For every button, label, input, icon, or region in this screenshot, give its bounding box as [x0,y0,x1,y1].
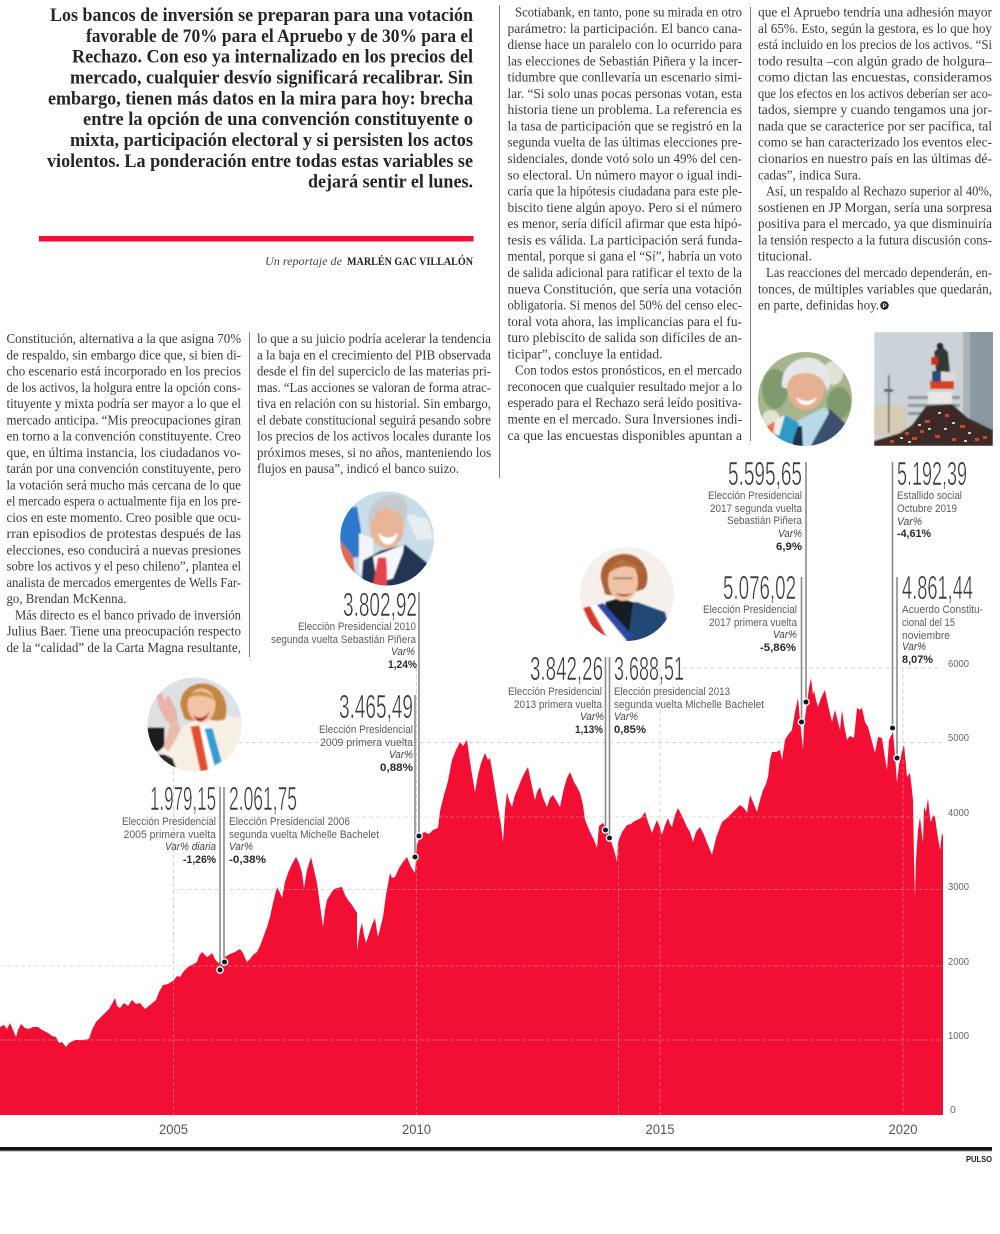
callout: 5.192,39: Estallido social [897,490,962,502]
callout: 1.979,15: Elección Presidencial [122,816,216,828]
bottom rule [0,1147,992,1152]
text column 2: el debate constitucional seguirá pesando sobre [257,413,491,428]
callout: 5.192,39 [889,455,967,731]
lead paragraph: dejará sentir el lunes. [308,173,473,193]
lead paragraph: Los bancos de inversión se preparan para una votación [50,6,474,26]
callout: 5.076,02: 5.076,02 [723,569,796,606]
text column 3: segunda vuelta de las últimas elecciones pre- [508,136,742,151]
text column 3: es menor, sería difícil afirmar que esta hipó- [508,217,742,232]
lead paragraph: entre la opción de una convención constituyente o [83,110,473,130]
callout: 1.979,15 [122,780,223,973]
text column 3: ticipar”, concluye la entidad. [508,347,662,362]
text column 2: flujos en pausa”, indicó el banco suizo. [257,462,459,477]
icon: end-of-article bullet: P [882,303,887,310]
byline: Un reportaje de [265,254,343,268]
callout: 3.842,26: 1,13% [575,724,603,736]
text column 1: analista de mercados emergentes de Wells Far- [6,576,241,591]
text column 1: Julius Baer. Tiene una preocupación respecto [6,624,241,640]
y axis labels: 3000 [948,881,969,893]
text column 1: de los activos, la holgura entre la opción cons- [6,381,241,396]
callout: 3.842,26: Var% [580,711,604,723]
text column 1: el mercado espera o actualmente fija en los pre- [6,494,241,510]
text column 1: rran episodios de protestas después de las [6,527,241,542]
callout: 3.688,51: Var% [614,711,638,723]
callout: 4.861,44: noviembre [902,630,950,642]
text column 1: sobre los activos y el peso chileno”, plantea el [6,560,241,574]
text column 3: diense hace un paralelo con lo ocurrido para [508,38,743,53]
lead paragraph: violentos. La ponderación entre todas estas variables se [47,152,473,172]
callout: 5.595,65: 5.595,65 [728,455,802,492]
callout: 3.802,92: Var% [391,646,415,658]
callout: 5.076,02 [703,569,805,725]
callout: 5.076,02: -5,86% [760,642,796,654]
callout: 3.688,51: Elección presidencial 2013 [614,686,730,698]
text column 4: cionarios en nuestro país en las últimas dé- [758,152,992,167]
callout: 5.192,39: -4,61% [897,528,931,540]
x axis labels [159,1122,918,1137]
callout: 2.061,75 [221,780,379,965]
text column 3: caría que la hipótesis ciudadana para este ple- [508,185,742,200]
y axis labels: 4000 [948,807,969,819]
text column 1: go, Brendan McKenna. [6,592,126,607]
text column 3: turo plebiscito de salida son difíciles de an- [508,331,742,346]
text column 4: nada que se caracterice por ser pacífica, tal [758,120,992,134]
callout: 5.595,65: Elección Presidencial [708,490,802,502]
callout: 5.192,39: Octubre 2019 [897,503,957,515]
text column 1: tituyente y mixta podría ser mayor a lo que el [6,397,241,412]
text column 1: de respaldo, sin embargo dice que, si bien di- [6,348,241,363]
callout: 2.061,75: -0,38% [229,854,266,866]
photo: social uprising crowd on monument [874,330,995,446]
text column 1: Constitución, alternativa a la que asigna 70% [6,332,241,347]
gridlines over the area [0,760,943,1115]
lead paragraph: favorable de 70% para el Apruebo y de 30% para el [86,27,473,47]
callout: 3.465,49: Elección Presidencial [319,724,413,736]
text column 4: como dictan las encuestas, consideramos [758,71,992,86]
callout: 1.979,15: 2005 primera vuelta [124,829,217,841]
lead paragraph [47,6,474,193]
text column 1: en torno a la convención constituyente. Creo [6,430,241,444]
text column 1: de la “calidad” de la Carta Magna resultante, [6,641,241,656]
text column 4: todo resulta –con algún grado de holgura– [758,54,993,69]
text column 1: Más directo es el banco privado de inversión [15,608,241,623]
y axis labels: 0 [950,1104,956,1116]
text column 1: tarán por una convención constituyente, pero [6,462,241,477]
text column 3: ca que las encuestas disponibles apuntan a [508,429,743,444]
text column 1: que, en última instancia, los ciudadanos vo- [6,446,241,461]
callout: 3.688,51: 0,85% [614,724,646,736]
callout: 5.595,65 [708,455,809,705]
callout: 3.842,26: 2013 primera vuelta [514,699,603,711]
callout: 1.979,15: -1,26% [183,854,216,866]
callout: 3.465,49: Var% [389,749,413,761]
callout: 2.061,75: segunda vuelta Michelle Bachelet [229,829,379,841]
text column 3: Scotiabank, en tanto, pone su mirada en otro [515,6,742,20]
y axis labels: 1000 [948,1030,969,1042]
callout: 4.861,44: Var% [902,641,926,653]
y axis labels [948,658,969,1116]
chart gridlines [0,668,943,1115]
lead paragraph: Rechazo. Con eso ya internalizado en los precios del [72,48,473,68]
text column 2 [257,332,492,477]
callout: 3.842,26 [508,650,609,833]
text column 2: lo que a su juicio podría acelerar la tendencia [257,332,492,347]
text column 3: esperado para el Rechazo será leído positiva- [508,396,742,411]
text column 4: titucional. [758,250,812,265]
y axis labels: 5000 [948,732,969,744]
callout: 2.061,75: Var% [229,841,253,853]
lead paragraph: mixta, participación electoral y si persisten los actos [70,131,473,151]
text column 3 [508,6,743,444]
text column 3: la tasa de participación que se registró en la [508,120,743,134]
text column 1: mercado anticipa. “Mis preocupaciones giran [6,413,241,428]
callout: 3.802,92 [271,586,422,839]
text column 2: los precios de los activos locales durante los [257,430,491,444]
callout: 5.076,02: Elección Presidencial [703,604,797,616]
callout: 5.595,65: 2017 segunda vuelta [710,503,803,515]
callout: 3.802,92: 3.802,92 [343,586,417,623]
callout: 3.465,49 [319,688,418,860]
text column 3: toral vota ahora, las implicancias para el fu- [508,315,742,330]
byline: MARLÉN GAC VILLALÓN [347,254,474,268]
credit: PULSO [966,1154,992,1164]
text column 3: parámetro: la participación. El banco cana- [508,22,742,37]
callout: 5.595,65: Sebastián Piñera [727,515,803,527]
text column 3: las elecciones de Sebastián Piñera y la incer- [508,54,742,69]
callout: 3.688,51 [606,650,764,841]
text column 1 [6,332,241,656]
photo: Bachelet waving [148,678,242,772]
text column 2: a la baja en el crecimiento del PIB observada [257,348,492,363]
text column 3: historia tiene un problema. La referencia es [508,103,742,118]
text column 3: biscito tiene algún apoyo. Pero si el número [508,201,742,216]
text column 2: tiva en relación con su historial. Sin embargo, [257,397,491,412]
text column 3: nueva Constitución, que sería una votación [508,282,742,297]
text column 4: sostienen en JP Morgan, sería una sorpresa [758,201,993,216]
text column 3: so electoral. Un número mayor o igual indi- [508,168,742,183]
text column 3: reconocen que cualquier resultado mejor a lo [508,380,742,395]
text column 4: como se han caracterizado los eventos elec- [758,136,992,151]
callout: 5.076,02: Var% [773,629,797,641]
callout: 5.076,02: 2017 primera vuelta [709,617,798,629]
lead paragraph: mercado, cualquier desvío significará recalibrar. Sin [70,68,474,88]
callout: 2.061,75: 2.061,75 [229,780,297,817]
icon: end-of-article bullet [880,301,889,310]
text column 1: cios en este momento. Creo posible que ocu- [6,511,241,526]
callout: 4.861,44: cional del 15 [902,617,955,629]
callout: 4.861,44: 8,07% [902,654,933,666]
callout: 3.802,92: 1,24% [388,659,417,671]
callout: 3.842,26: Elección Presidencial [508,686,602,698]
y axis labels: 6000 [948,658,969,670]
callout: 3.802,92: segunda vuelta Sebastián Piñera [271,634,417,646]
text column 4: en parte, definidas hoy. [758,298,879,314]
text column 4: cadas”, indica Sura. [758,168,861,183]
callout: 3.688,51: 3.688,51 [614,650,684,687]
text column 2: próximos meses, si no años, manteniendo los [257,446,491,461]
x axis labels: 2020 [888,1122,918,1137]
text column 3: tidumbre que conllevaría un escenario simi- [508,71,742,86]
x axis labels: 2010 [402,1122,431,1137]
text column 3: sidenciales, donde votó solo un 49% del cen- [508,152,742,167]
callout: 3.802,92: Elección Presidencial 2010 [298,621,416,633]
callout: 5.595,65: Var% [778,528,802,540]
callout: 3.465,49: 0,88% [380,762,413,774]
callout: 3.465,49: 3.465,49 [339,688,413,725]
text column 3: tesis es válida. La participación será funda- [508,233,742,248]
text column 2: desde el fin del superciclo de las materias pri- [257,364,491,380]
text column 4: positiva para el mercado, ya que disminuiría [758,217,993,232]
area chart: stock index 2001-2020 [0,678,943,1115]
x axis labels: 2015 [646,1122,674,1137]
text column 4: que el Apruebo tendría una adhesión mayor [758,6,992,20]
photo: Piñera with flag [340,492,434,586]
callout: 2.061,75: Elección Presidencial 2006 [229,816,350,828]
text column 1: la votación será mucho más cercana de lo que [6,478,241,493]
photo: Piñera smiling [758,352,852,446]
callout: 3.688,51: segunda vuelta Michelle Bachelet [614,699,764,711]
text column 4: tados, siempre y cuando tengamos una jor- [758,103,992,118]
text column 1: elecciones, eso conducirá a nuevas presiones [6,543,241,558]
column dividers [250,5,750,657]
text column 4: tonces, de múltiples variables que quedarán, [758,282,992,297]
callout: 5.595,65: 6,9% [776,541,802,553]
callout: 3.465,49: 2009 primera vuelta [320,737,414,749]
text column 3: lar. “Si solo unas pocas personas votan, esta [508,87,743,102]
callout: 4.861,44 [894,569,983,761]
callout: 5.192,39: Var% [897,516,922,528]
lead paragraph: embargo, tienen más datos en la mira para hoy: brecha [48,89,473,109]
callout: 3.842,26: 3.842,26 [530,650,603,687]
text column 4 [758,6,993,314]
text column 3: de salida adicional para ratificar el texto de la [508,266,743,281]
red rule under lead [39,236,474,242]
byline [265,254,474,268]
callout: 1.979,15: 1.979,15 [150,780,216,817]
text column 3: mental, porque si gana el “Sí”, habría un voto [508,250,742,265]
text column 1: cho escenario está incorporado en los precios [6,364,241,380]
callout: 4.861,44: Acuerdo Constitu- [902,604,983,616]
callout: 1.979,15: Var% diaria [165,841,216,853]
text column 3: mente en el mercado. Sura Inversiones indi- [508,412,742,428]
photo: Bachelet with sash [580,547,674,641]
text column 3: Con todos estos pronósticos, en el mercado [515,364,742,379]
y axis labels: 2000 [948,956,969,968]
text column 2: mas. “Las acciones se valoran de forma atrac- [257,381,491,396]
text column 3: obligatoria. Si menos del 50% del censo elec- [508,298,742,314]
x axis labels: 2005 [159,1122,188,1137]
